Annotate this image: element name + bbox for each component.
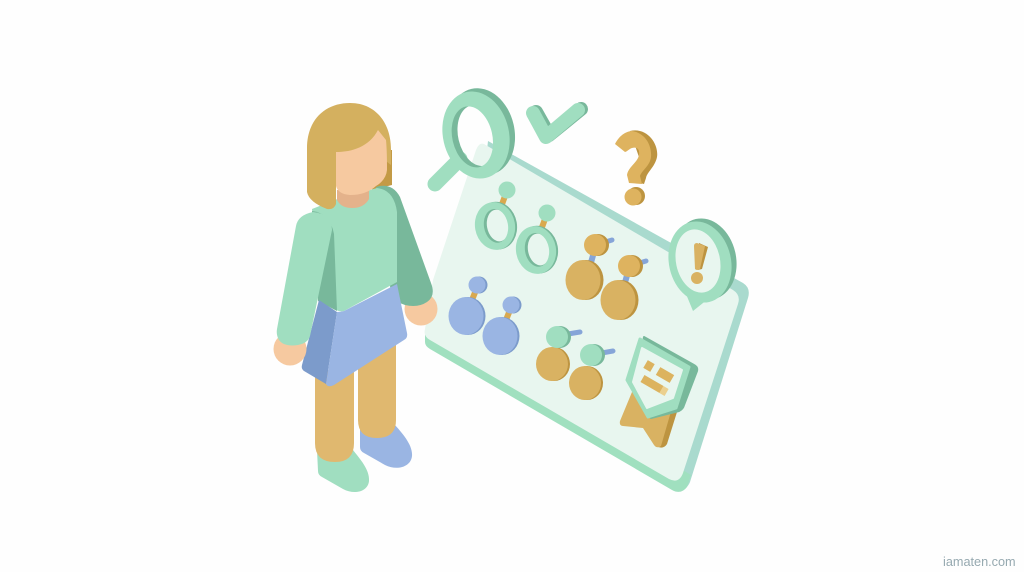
disc <box>482 317 518 355</box>
panel: tilted board <box>425 141 749 492</box>
disc depth <box>604 280 638 320</box>
ball <box>584 234 606 256</box>
icon: alert speech bubble <box>661 212 744 311</box>
arm: left sleeve <box>277 212 332 345</box>
face <box>336 130 387 195</box>
ball depth <box>549 326 571 348</box>
disc <box>536 347 568 381</box>
bar small <box>643 360 655 372</box>
skirt side <box>302 300 337 384</box>
disc <box>448 297 484 335</box>
board edge: teal <box>470 141 749 489</box>
hair <box>307 103 391 209</box>
icon: gold disc earrings with green studs <box>536 326 613 400</box>
neck <box>337 190 369 208</box>
bar end <box>659 386 669 396</box>
body side shade <box>312 211 337 311</box>
ball <box>502 296 520 314</box>
gold earring one <box>566 234 612 300</box>
ball <box>618 255 640 277</box>
ball <box>468 276 486 294</box>
ring depth <box>514 223 562 277</box>
stem <box>501 196 505 207</box>
ball depth <box>470 276 488 294</box>
board surface <box>425 144 739 481</box>
check front <box>533 110 578 137</box>
green stud earring one <box>536 326 580 381</box>
badge front <box>627 339 689 417</box>
bubble inner <box>670 225 726 297</box>
disc <box>569 366 601 400</box>
ball depth <box>504 296 522 314</box>
exclamation bar <box>694 243 705 270</box>
question dot depth <box>627 187 645 205</box>
ball depth <box>583 344 605 366</box>
stem <box>624 272 628 286</box>
exclamation dot <box>691 272 703 284</box>
ball depth <box>621 255 643 277</box>
ring <box>471 199 519 253</box>
blue earring one <box>448 276 488 335</box>
blue earring two <box>482 296 522 355</box>
post <box>596 351 613 354</box>
magnifier rim depth <box>439 81 523 182</box>
badge inner <box>633 348 682 408</box>
stem <box>541 219 545 230</box>
ribbon <box>620 392 672 447</box>
figure: woman <box>274 103 438 492</box>
arm: right dark sleeve <box>376 186 433 306</box>
bubble depth <box>666 212 744 306</box>
bar long <box>640 375 664 393</box>
hand: left <box>274 332 306 366</box>
bubble front <box>661 215 739 309</box>
disc depth <box>538 347 570 381</box>
ball <box>498 182 516 198</box>
disc depth <box>571 366 603 400</box>
ring earring two <box>512 204 562 277</box>
disc <box>600 280 636 320</box>
stem <box>590 252 594 266</box>
ball depth <box>587 234 609 256</box>
question front <box>615 131 651 184</box>
icon: question mark <box>615 130 657 206</box>
exclamation depth <box>698 243 708 270</box>
icon: gold disc earrings with blue posts <box>566 234 646 320</box>
watermark: iamaten.com <box>943 555 1016 569</box>
disc depth <box>484 317 520 355</box>
ball <box>546 326 568 348</box>
stem <box>506 310 510 320</box>
post <box>562 332 580 335</box>
ring <box>512 223 560 277</box>
board edge: green bottom <box>425 325 691 492</box>
green stud earring two <box>569 344 613 400</box>
bar right <box>656 367 674 383</box>
ring earring one <box>471 182 521 253</box>
ring depth <box>473 199 521 253</box>
disc <box>566 260 600 300</box>
ball <box>538 204 556 222</box>
shoe: green <box>317 450 369 492</box>
question depth <box>630 130 657 184</box>
check depth <box>536 109 581 135</box>
icon: ribbon badge <box>620 337 697 448</box>
post <box>596 240 612 245</box>
post <box>630 261 646 266</box>
icon: magnifying glass <box>434 81 523 185</box>
shoe: blue <box>360 425 412 468</box>
question dot <box>624 188 642 206</box>
badge text bars <box>640 360 674 396</box>
leg: back <box>358 340 396 438</box>
disc depth <box>450 297 486 335</box>
hand: right <box>404 292 438 326</box>
stem <box>472 290 476 300</box>
ball <box>580 344 602 366</box>
magnifier handle <box>435 159 460 184</box>
torso <box>312 188 397 311</box>
icon: check mark <box>533 109 581 137</box>
badge depth <box>636 337 697 418</box>
skirt front <box>326 284 407 386</box>
magnifier rim <box>434 85 518 185</box>
icon: ring earrings <box>471 182 562 277</box>
ribbon depth <box>658 408 677 448</box>
bubble tail <box>686 294 708 311</box>
icon: blue disc earrings <box>448 276 522 355</box>
disc depth <box>568 260 604 300</box>
leg: front <box>315 370 354 462</box>
gold earring two <box>600 255 646 320</box>
hair back shade <box>372 150 392 190</box>
